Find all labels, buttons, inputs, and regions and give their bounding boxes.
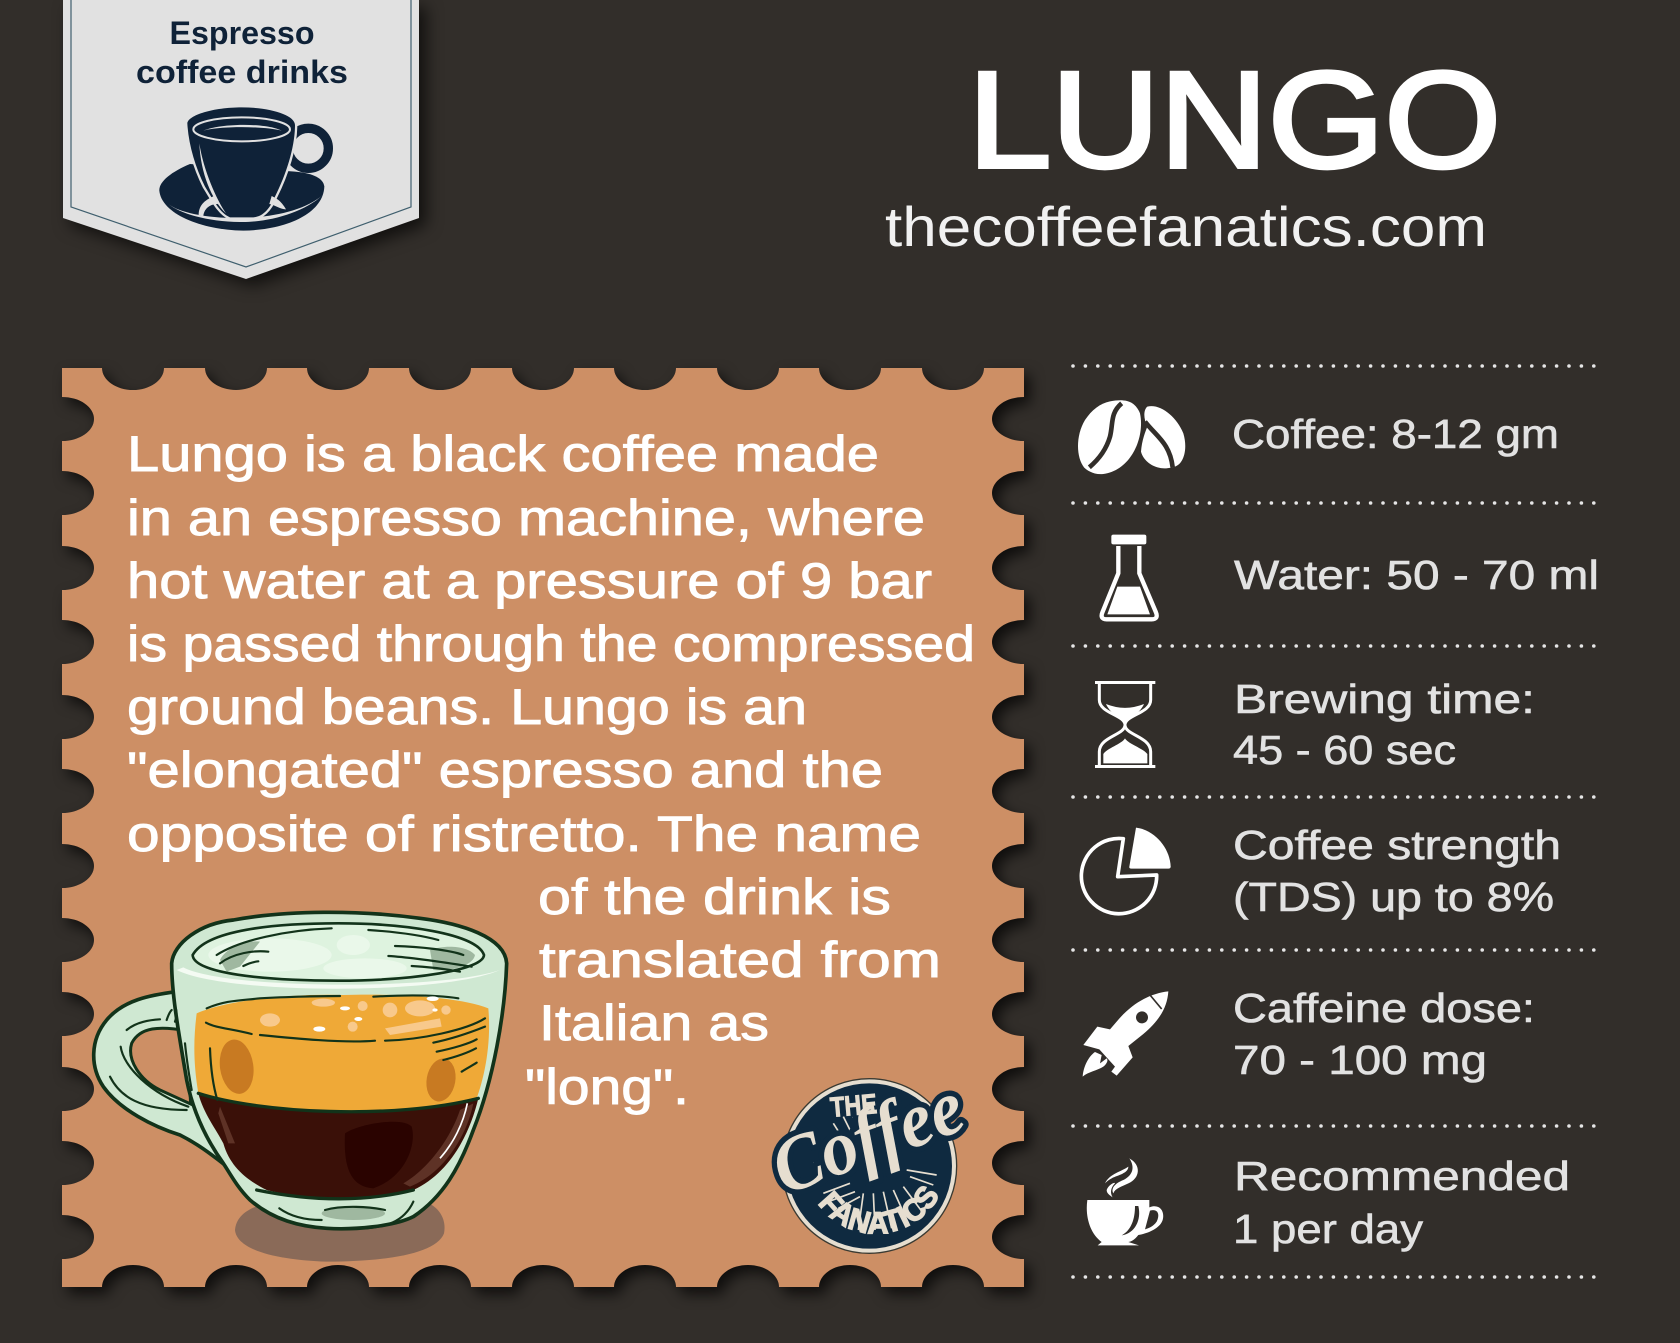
description text: "long". xyxy=(525,1059,689,1115)
logo: the coffee fanatics: FANATICS xyxy=(818,1186,938,1234)
description text: Italian as xyxy=(539,995,769,1051)
description text: of the drink is xyxy=(538,869,891,925)
description text: opposite of ristretto. The name xyxy=(127,806,921,862)
spec row: coffee xyxy=(1078,400,1559,474)
spec text xyxy=(1233,822,1561,920)
banner heading: Espresso xyxy=(170,15,314,51)
description text: "elongated" espresso and the xyxy=(127,742,883,798)
spec text: (TDS) up to 8% xyxy=(1233,874,1554,920)
spec row: recommended xyxy=(1087,1153,1570,1252)
icon: steaming cup xyxy=(1087,1158,1163,1245)
spec text: Coffee strength xyxy=(1233,822,1561,868)
title: LUNGO xyxy=(968,44,1501,197)
icon: flask xyxy=(1102,535,1157,619)
website url: thecoffeefanatics.com xyxy=(885,195,1487,258)
logo: the coffee fanatics: THE xyxy=(829,1088,878,1123)
banner heading: coffee drinks xyxy=(136,54,348,90)
spec row: caffeine dose xyxy=(1083,985,1535,1083)
banner heading xyxy=(136,15,348,90)
icon: cup and saucer xyxy=(159,107,328,231)
banner: espresso coffee drinks xyxy=(63,0,419,279)
spec text xyxy=(1233,1153,1570,1252)
description text: hot water at a pressure of 9 bar xyxy=(127,553,932,609)
description text: translated from xyxy=(539,932,941,988)
icon: coffee beans xyxy=(1078,400,1185,474)
logo: the coffee fanatics: Coffee xyxy=(760,1062,975,1211)
spec text xyxy=(1233,985,1535,1083)
stamp shape xyxy=(62,368,1024,1287)
description text: Lungo is a black coffee made xyxy=(127,426,879,482)
spec row: coffee strength xyxy=(1081,822,1561,920)
spec text: Caffeine dose: xyxy=(1233,985,1535,1031)
dotted dividers xyxy=(1073,366,1597,1277)
spec text: Recommended xyxy=(1234,1153,1570,1199)
spec text: 70 - 100 mg xyxy=(1233,1037,1487,1083)
description text: in an espresso machine, where xyxy=(127,490,925,546)
spec row: brewing time xyxy=(1095,676,1535,773)
spec text: 1 per day xyxy=(1233,1206,1424,1252)
icon: hourglass xyxy=(1095,681,1155,768)
banner shape xyxy=(63,0,419,279)
description text: is passed through the compressed xyxy=(127,616,975,672)
spec text xyxy=(1233,676,1535,773)
panel: stamp description xyxy=(62,368,1035,1299)
spec text: Coffee: 8-12 gm xyxy=(1232,411,1559,457)
spec row: water xyxy=(1102,535,1599,619)
icon: pie chart xyxy=(1081,828,1171,914)
illustration: glass cup of lungo xyxy=(94,912,507,1262)
spec text: 45 - 60 sec xyxy=(1233,727,1456,773)
description text xyxy=(127,426,975,1115)
spec text: Water: 50 - 70 ml xyxy=(1234,552,1599,598)
description text: ground beans. Lungo is an xyxy=(127,679,807,735)
spec text: Brewing time: xyxy=(1234,676,1535,722)
icon: rocket xyxy=(1083,991,1168,1077)
